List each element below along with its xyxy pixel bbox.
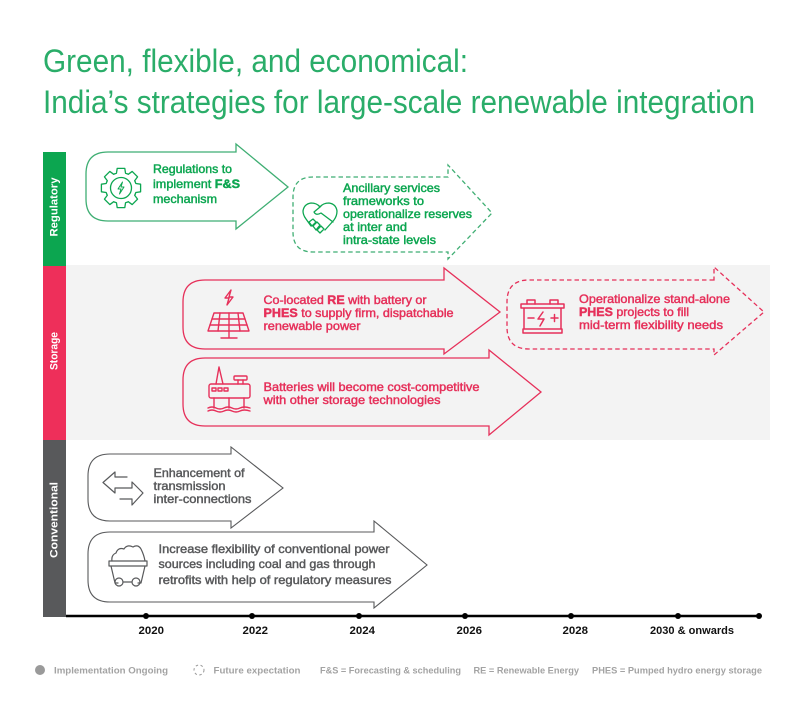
panel: storage background xyxy=(66,265,770,440)
text: flexibility: retrofits with help of regulatory measures xyxy=(158,573,392,587)
icon: gear with bolt xyxy=(101,168,141,208)
arrow card: transmission xyxy=(88,447,283,528)
text: batteries: with other storage technologies xyxy=(262,393,440,407)
text: regulations: Regulations to xyxy=(153,162,232,176)
text: operationalize xyxy=(579,292,730,332)
text: regulations xyxy=(153,162,240,206)
text: ancillary xyxy=(343,181,472,247)
text: batteries xyxy=(262,380,480,407)
text: operationalize: mid-term flexibility needs xyxy=(579,318,723,332)
category: storage: Storage xyxy=(48,332,60,370)
timeline axis: 2028 xyxy=(562,625,588,637)
text: transmission: transmission xyxy=(154,479,226,493)
legend: PHES = Pumped hydro energy storage xyxy=(592,666,762,676)
timeline axis: 2024 xyxy=(350,625,376,637)
legend: RE = Renewable Energy xyxy=(474,666,580,676)
title: Green, flexible, and economical: xyxy=(43,43,468,79)
arrow card: stand-alone PHES xyxy=(507,267,764,355)
text: co-located: renewable power xyxy=(264,319,361,333)
arrow card: conventional flexibility xyxy=(88,521,427,608)
text: flexibility: sources including coal and gas through xyxy=(158,557,376,571)
legend: Future expectation xyxy=(214,666,301,676)
text: transmission: inter-connections xyxy=(154,492,252,506)
icon: coal cart xyxy=(109,546,147,586)
text: ancillary: at inter and xyxy=(343,220,407,234)
arrow card: regulations F&S xyxy=(86,144,288,229)
text: batteries: Batteries will become cost-competitive xyxy=(264,380,480,394)
text: operationalize: Operationalize stand-alone xyxy=(579,292,730,306)
text: flexibility xyxy=(158,542,392,587)
text: co-located xyxy=(264,293,454,333)
title: India’s strategies for large-scale renewable integration xyxy=(43,84,755,120)
icon: battery xyxy=(521,300,564,333)
timeline axis: 2026 xyxy=(456,625,482,637)
text: transmission xyxy=(154,466,252,506)
text: co-located: PHES to supply firm, dispatchable xyxy=(264,306,454,320)
text: ancillary: operationalize reserves xyxy=(343,207,472,221)
category: storage xyxy=(43,266,66,440)
arrow card: co-located RE xyxy=(183,268,500,354)
legend: F&S = Forecasting & scheduling xyxy=(320,666,461,676)
timeline axis: 2020 xyxy=(138,625,164,637)
timeline axis xyxy=(66,613,762,637)
category: conventional: Conventional xyxy=(48,482,60,558)
icon: two-way arrows xyxy=(103,472,143,505)
legend xyxy=(35,665,762,676)
text: operationalize: PHES projects to fill xyxy=(579,305,689,319)
icon: offshore platform xyxy=(208,367,250,412)
timeline axis: 2022 xyxy=(242,625,268,637)
category: conventional xyxy=(43,440,66,617)
legend: Implementation Ongoing xyxy=(54,666,168,676)
text: co-located: Co-located RE with battery or xyxy=(264,293,426,307)
text: regulations: implement F&S xyxy=(153,177,240,191)
category: regulatory xyxy=(43,152,66,266)
arrow card: ancillary services xyxy=(293,165,492,259)
text: ancillary: intra-state levels xyxy=(343,233,436,247)
category: regulatory: Regulatory xyxy=(48,177,60,236)
timeline axis: 2030 & onwards xyxy=(650,625,734,637)
title xyxy=(43,43,755,120)
text: ancillary: Ancillary services xyxy=(343,181,440,195)
text: flexibility: Increase flexibility of conventional power xyxy=(158,542,390,556)
text: transmission: Enhancement of xyxy=(154,466,245,480)
icon: handshake heart xyxy=(303,203,337,233)
icon: solar panel xyxy=(208,290,249,338)
text: regulations: mechanism xyxy=(153,192,217,206)
arrow card: batteries cost-competitive xyxy=(183,350,541,435)
text: ancillary: frameworks to xyxy=(343,194,424,208)
